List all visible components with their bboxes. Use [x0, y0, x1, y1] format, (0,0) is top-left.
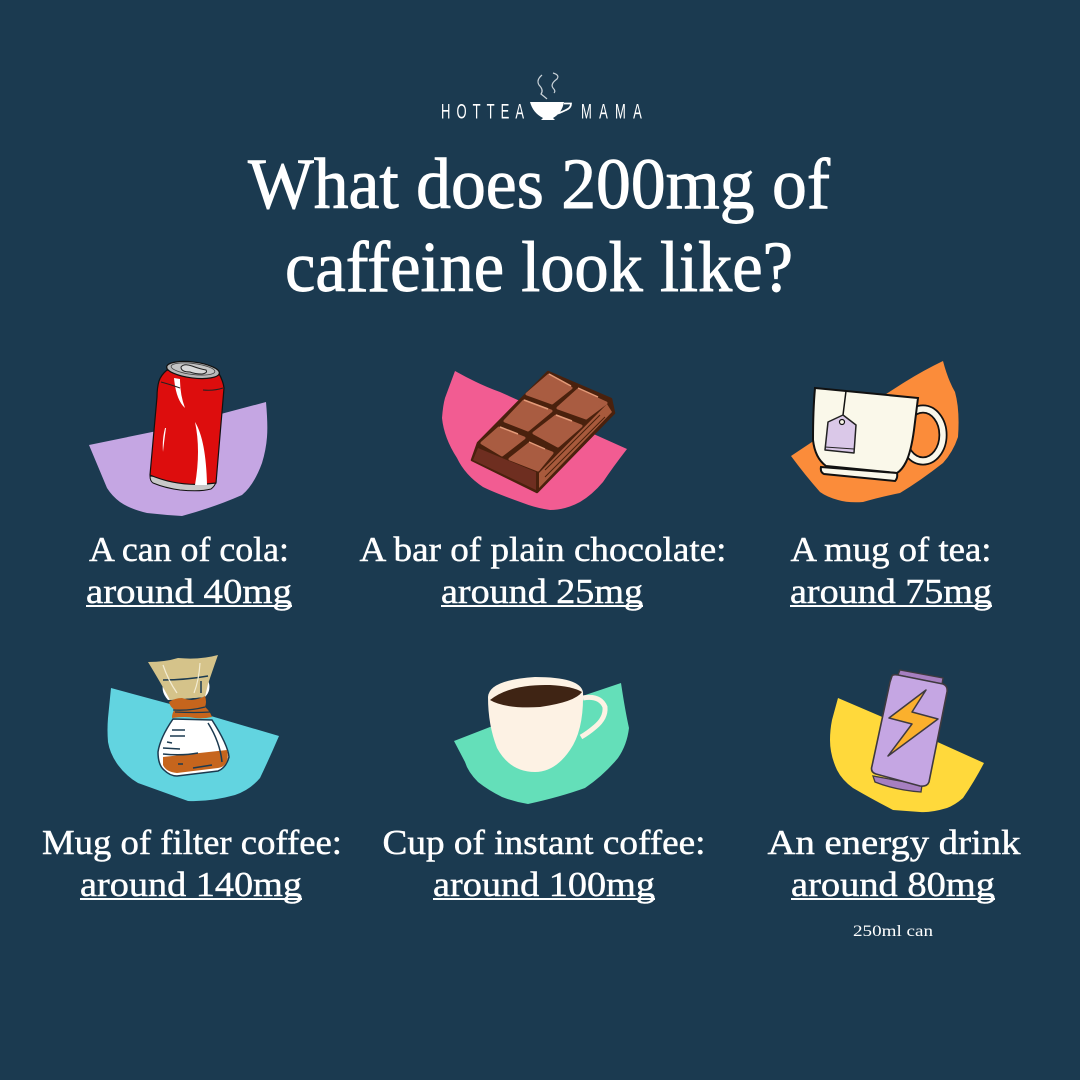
- title: [248, 144, 830, 307]
- note: can size: 250ml can: [853, 923, 933, 940]
- icon: purple energy can: [872, 670, 947, 792]
- label: tea: A mug of tea:: [790, 530, 992, 569]
- title: caffeine look like?: [285, 227, 793, 307]
- blob: mint: [454, 683, 629, 804]
- blob: pink: [442, 371, 627, 510]
- label: chocolate: around 25mg: [441, 572, 643, 611]
- blob: cyan: [108, 688, 279, 801]
- blob: orange: [791, 361, 959, 502]
- label: cola: A can of cola:: [89, 530, 289, 569]
- item: mug of tea: [790, 361, 992, 611]
- label: filter coffee: [42, 823, 342, 904]
- label: energy drink: around 80mg: [791, 865, 995, 904]
- icon: filter coffee flask: [148, 655, 229, 776]
- label: energy drink: An energy drink: [768, 823, 1021, 862]
- item: mug of filter coffee: [42, 655, 342, 904]
- logo wordmark left: HOTTEA: [441, 99, 524, 123]
- title: What does 200mg of: [248, 144, 830, 224]
- item: energy drink: [768, 670, 1021, 940]
- icon: instant coffee cup: [488, 677, 605, 772]
- label: instant coffee: [382, 823, 706, 904]
- item: can of cola: [86, 359, 292, 611]
- label: cola: around 40mg: [86, 572, 292, 611]
- icon: logo cup with steam: [530, 73, 571, 120]
- blob: lilac: [89, 402, 267, 516]
- icon: red cola can: [150, 359, 224, 491]
- label: tea: around 75mg: [790, 572, 992, 611]
- label: filter coffee: around 140mg: [80, 865, 302, 904]
- label: tea: [790, 530, 992, 611]
- item: bar of plain chocolate: [360, 371, 726, 611]
- label: chocolate: [360, 530, 726, 611]
- icon: chocolate bar: [472, 372, 614, 492]
- label: instant coffee: Cup of instant coffee:: [382, 823, 706, 862]
- label: energy drink: [768, 823, 1021, 940]
- icon: tea mug: [813, 388, 943, 481]
- logo wordmark right: MAMA: [581, 99, 642, 123]
- label: filter coffee: Mug of filter coffee:: [42, 823, 342, 862]
- label: instant coffee: around 100mg: [433, 865, 655, 904]
- item: cup of instant coffee: [382, 677, 706, 904]
- label: chocolate: A bar of plain chocolate:: [360, 530, 726, 569]
- label: cola: [86, 530, 292, 611]
- logo: Hottea Mama: [441, 73, 642, 123]
- blob: yellow: [830, 698, 984, 812]
